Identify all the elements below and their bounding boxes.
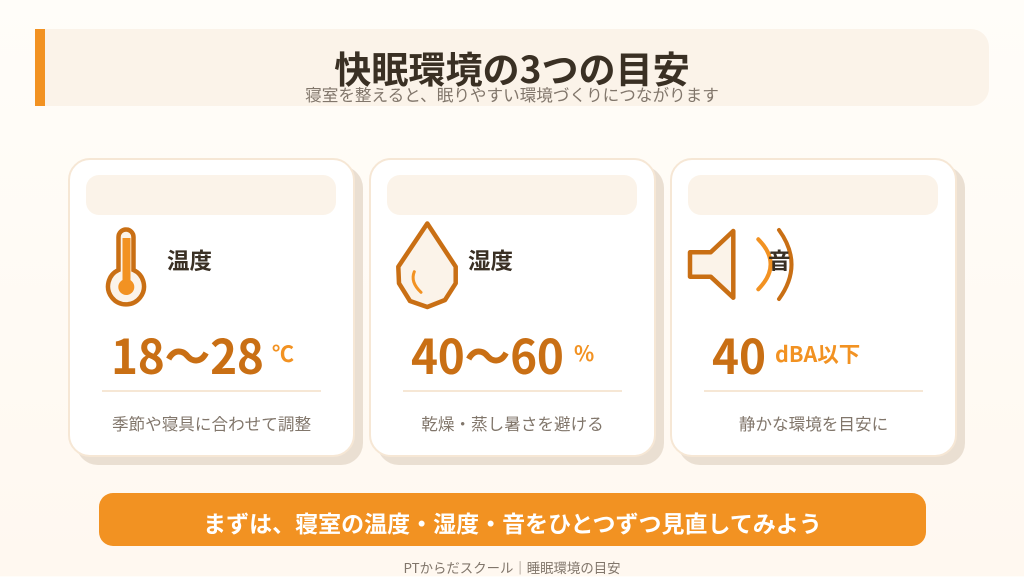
title: 快眠環境の3つの目安 [334,40,690,94]
label strip [86,175,336,215]
header accent bar [35,29,45,106]
heading: humidity: 湿度 [468,244,513,276]
value: temperature: 18〜28 [111,318,264,388]
note: humidity: 乾燥・蒸し暑さを避ける [421,411,604,435]
unit: celsius: ℃ [272,337,294,369]
divider [704,390,923,392]
banner text: まずは、寝室の温度・湿度・音をひとつずつ見直してみよう [203,505,822,539]
panel: temperature [68,158,355,457]
heading: sound: 音 [768,244,791,276]
footer: PTからだスクール｜睡眠環境の目安 [404,557,620,577]
divider [403,390,622,392]
divider [102,390,321,392]
unit: percent: % [574,338,594,368]
label strip [387,175,637,215]
subtitle: 寝室を整えると、眠りやすい環境づくりにつながります [305,82,719,106]
note: temperature: 季節や寝具に合わせて調整 [112,411,311,435]
value: sound: 40 [712,318,766,388]
unit: dBA or less: dBA以下 [775,338,860,369]
heading: temperature: 温度 [167,244,212,276]
call to action banner [99,493,926,546]
value: humidity: 40〜60 [411,318,564,388]
panel: humidity [369,158,656,457]
header panel [45,29,989,106]
note: sound: 静かな環境を目安に [739,411,888,435]
header [35,29,989,106]
label strip [688,175,938,215]
panel: sound [670,158,957,457]
